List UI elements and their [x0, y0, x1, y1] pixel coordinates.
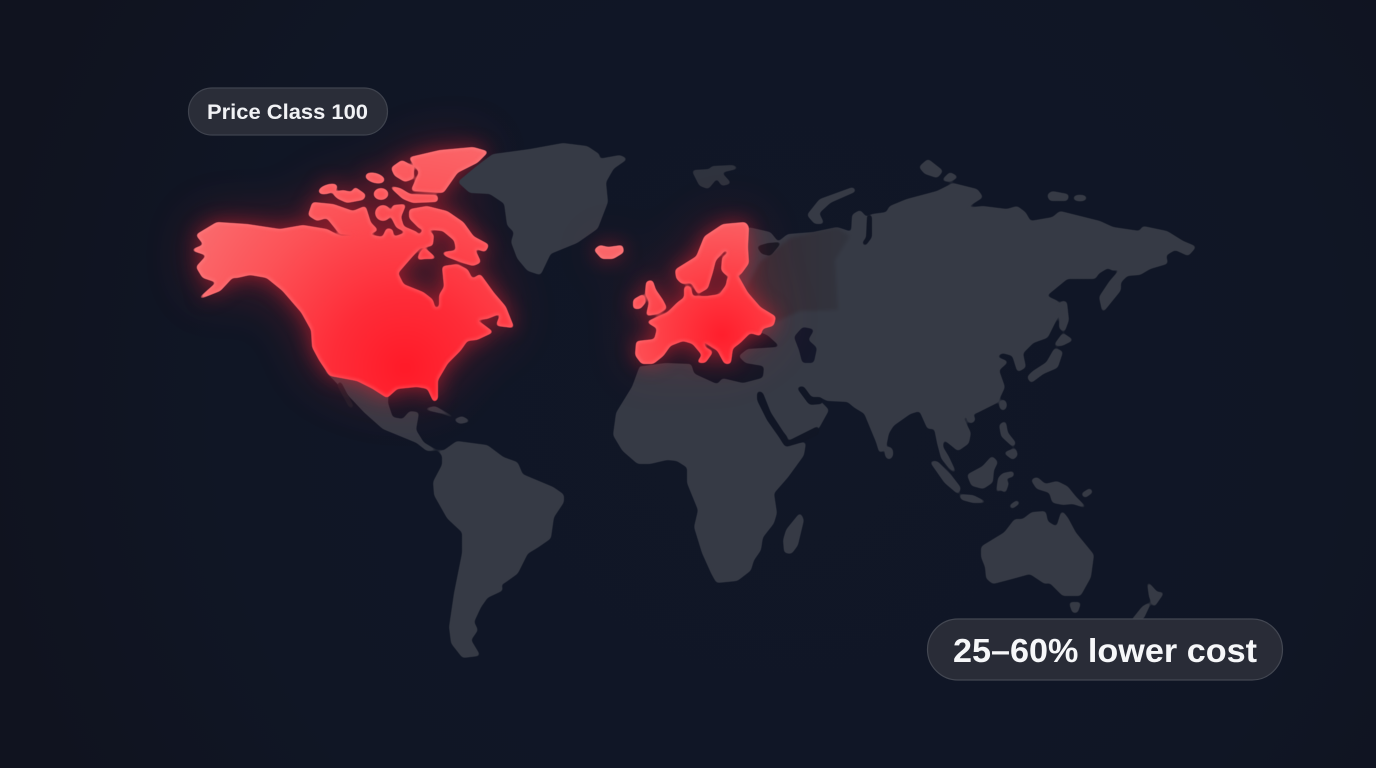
highlighted region: Europe — [595, 223, 775, 363]
world map: unhighlighted land — [325, 160, 1195, 657]
pill label: Price Class 100 — [188, 88, 388, 135]
Taiwan — [1000, 400, 1006, 410]
New Guinea — [1032, 478, 1085, 507]
pill callout: 25–60% lower cost: 25–60% lower cost — [953, 632, 1257, 669]
Svalbard — [693, 166, 737, 188]
Java — [960, 495, 985, 502]
Honshu — [1028, 349, 1062, 382]
Scandinavia — [676, 223, 748, 293]
New Britain — [1082, 489, 1092, 497]
Hokkaido — [1055, 334, 1072, 345]
Severnaya Zemlya small island — [943, 173, 957, 181]
New Zealand south island — [1131, 603, 1150, 622]
Southampton Island — [418, 249, 435, 259]
Hainan — [968, 416, 974, 422]
Hispaniola — [455, 417, 469, 423]
Red Sea — [758, 392, 787, 445]
Iceland — [595, 246, 623, 258]
South America — [434, 442, 563, 657]
Gulf of Aden — [786, 427, 818, 446]
continental Europe — [636, 277, 775, 363]
highlighted region: North America — [193, 148, 513, 401]
White Sea — [758, 243, 780, 255]
Australia — [982, 512, 1093, 595]
Arctic islet west — [318, 183, 338, 195]
Melville Island — [333, 188, 365, 202]
Severnaya Zemlya — [920, 160, 942, 177]
Eurasia and Africa landmass — [614, 184, 1195, 582]
Novaya Zemlya — [808, 188, 855, 223]
Luzon — [1000, 422, 1015, 446]
Mindanao — [1005, 449, 1017, 459]
Arctic islet centre — [374, 189, 388, 199]
pill label: Price Class 100: Price Class 100 — [207, 100, 368, 124]
North America mainland — [193, 223, 513, 401]
pill callout: 25–60% lower cost — [928, 619, 1282, 680]
Sri Lanka — [886, 448, 892, 458]
Borneo — [968, 457, 997, 488]
inland seas and gulfs — [338, 215, 871, 446]
Persian Gulf — [798, 387, 822, 404]
western Russia shaded region — [745, 228, 850, 322]
Ellesmere Island — [410, 148, 487, 192]
Axel Heiberg Island — [392, 161, 413, 181]
Timor — [1010, 501, 1019, 508]
Great Britain — [646, 281, 666, 315]
Tasmania — [1070, 603, 1080, 612]
Sakhalin — [1060, 302, 1068, 331]
Somerset Island — [392, 205, 418, 238]
Ob gulf slit — [863, 215, 871, 245]
Prince of Wales islet — [376, 206, 390, 220]
Madagascar — [784, 514, 803, 553]
Devon Island — [391, 187, 437, 202]
Gulf of California — [338, 382, 353, 407]
Cuba — [426, 407, 453, 417]
Sulawesi — [997, 472, 1013, 492]
Baffin Island — [410, 207, 488, 265]
Caspian Sea — [795, 328, 816, 362]
Victoria Island — [309, 203, 377, 234]
Sumatra — [931, 462, 960, 493]
Ireland — [634, 295, 645, 308]
Mexico and Central America — [325, 370, 448, 458]
Mediterranean and Black Sea — [636, 318, 778, 383]
New Siberian Islands — [1048, 192, 1068, 200]
New Zealand north island — [1148, 583, 1163, 606]
Wrangel island — [1074, 196, 1086, 200]
Greenland — [459, 144, 626, 274]
Arctic islet north — [365, 172, 385, 184]
